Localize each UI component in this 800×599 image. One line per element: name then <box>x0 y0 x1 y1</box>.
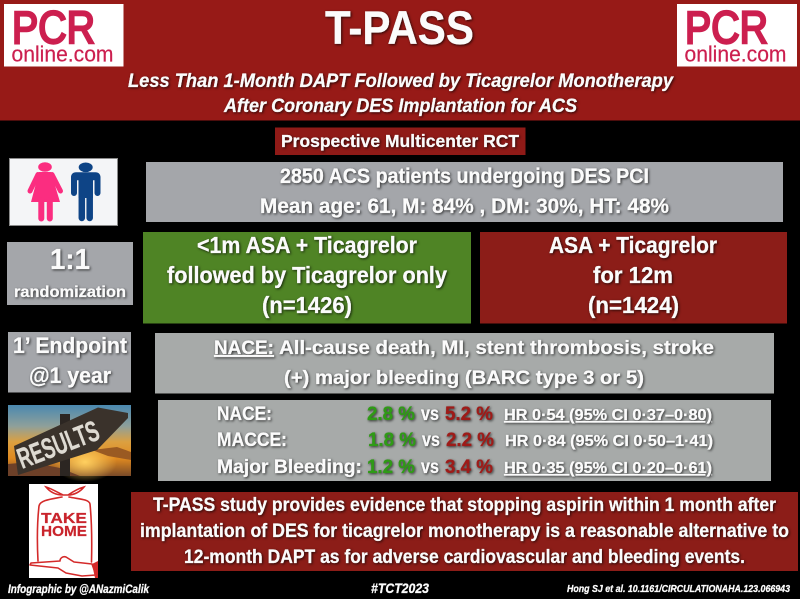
panel: patient population: Mean age: 61, M: 84% , DM: 30%, HT: 48% <box>260 195 669 218</box>
row: MACCE: MACCE: <box>217 429 287 451</box>
panel: randomization <box>7 242 133 305</box>
row: MACCE: 2.2 % <box>446 429 494 451</box>
logo: PCR online right <box>677 2 797 66</box>
title: T-PASS <box>325 1 474 54</box>
row: major bleeding: HR 0·35 (95% CI 0·20–0·61) <box>504 460 712 477</box>
panel: experimental arm: <1m ASA + Ticagrelor <box>197 232 417 258</box>
icon: take home bag: TAKE <box>41 510 87 527</box>
panel: results table <box>158 400 771 481</box>
panel: conclusion: 12-month DAPT as for adverse cardiovascular and bleeding events. <box>184 546 745 568</box>
study design label <box>275 128 526 155</box>
panel: endpoint label: @1 year <box>29 363 111 388</box>
icon: patients <box>10 158 118 226</box>
logo: PCR online right: PCR <box>685 2 768 53</box>
logo: PCR online left: PCR <box>12 2 95 53</box>
row: NACE: vs <box>421 403 439 425</box>
row: major bleeding <box>217 456 712 478</box>
panel: endpoint definition <box>155 333 774 394</box>
panel: endpoint label: 1’ Endpoint <box>13 333 128 358</box>
row: NACE: HR 0·54 (95% CI 0·37–0·80) <box>504 407 712 424</box>
panel: experimental arm: (n=1426) <box>262 292 352 318</box>
panel: control arm <box>480 232 787 324</box>
footer hashtag: #TCT2023 <box>371 580 429 596</box>
subtitle <box>128 71 674 117</box>
row: major bleeding: 3.4 % <box>445 456 493 478</box>
panel: experimental arm <box>143 232 471 324</box>
icon: take home bag: HOME <box>41 523 87 540</box>
panel: endpoint label <box>8 332 131 392</box>
subtitle: Less Than 1-Month DAPT Followed by Ticagrelor Monotherapy <box>128 71 674 92</box>
panel: control arm: for 12m <box>593 262 673 288</box>
row: major bleeding: vs <box>421 456 439 478</box>
panel: randomization: 1:1 <box>50 244 90 276</box>
icon: take home bag <box>29 484 98 578</box>
row: MACCE <box>217 429 713 451</box>
logo: PCR online left <box>4 2 124 66</box>
panel: randomization: randomization <box>14 284 126 301</box>
study design label: Prospective Multicenter RCT <box>281 131 519 151</box>
row: NACE: 2.8 % <box>367 403 415 425</box>
row: MACCE: HR 0·84 (95% CI 0·50–1·41) <box>505 433 713 450</box>
logo: PCR online left: online.com <box>12 42 114 66</box>
row: major bleeding: Major Bleeding: <box>217 456 362 478</box>
row: MACCE: 1.8 % <box>368 429 416 451</box>
panel: control arm: ASA + Ticagrelor <box>549 232 717 258</box>
panel: endpoint definition: NACE: <box>214 337 274 359</box>
row: NACE <box>217 403 712 425</box>
panel: endpoint definition: All-cause death, MI, stent thrombosis, stroke <box>279 337 714 359</box>
header banner <box>0 0 800 120</box>
panel: patient population <box>146 162 783 222</box>
panel: endpoint definition: (+) major bleeding (BARC type 3 or 5) <box>284 367 644 389</box>
row: NACE: 5.2 % <box>445 403 493 425</box>
panel: experimental arm: followed by Ticagrelor only <box>167 262 447 288</box>
icon: woman <box>30 162 60 218</box>
row: NACE: NACE: <box>217 403 272 425</box>
logo: PCR online right: online.com <box>684 42 786 66</box>
row: major bleeding: 1.2 % <box>367 456 415 478</box>
row: MACCE: vs <box>422 429 440 451</box>
icon: results signpost: RESULTS <box>13 415 104 476</box>
panel: conclusion <box>131 492 798 571</box>
footer credit: Infographic by @ANazmiCalik <box>8 582 150 596</box>
icon: man <box>71 162 100 218</box>
subtitle: After Coronary DES Implantation for ACS <box>223 96 577 117</box>
panel: control arm: (n=1424) <box>588 292 679 318</box>
panel: patient population: 2850 ACS patients undergoing DES PCI <box>280 165 649 188</box>
